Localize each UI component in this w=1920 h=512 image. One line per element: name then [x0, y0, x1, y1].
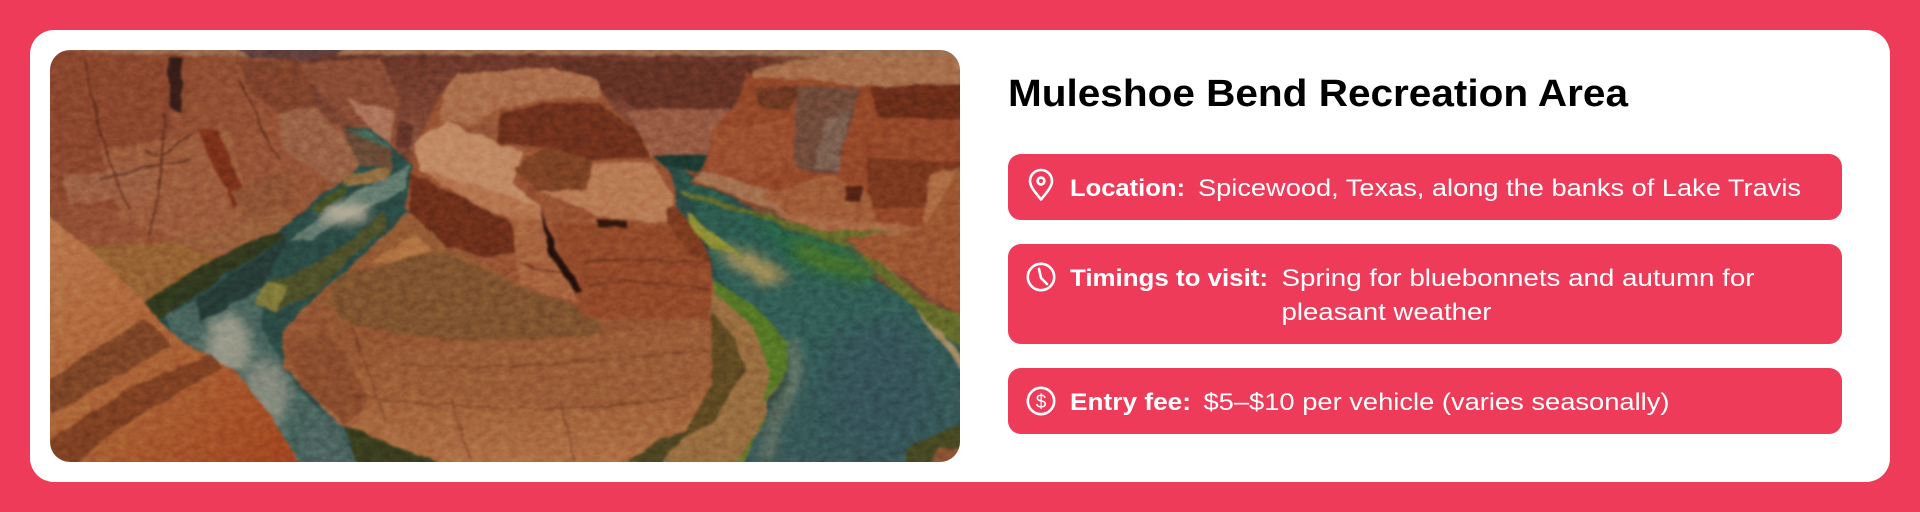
entry fee label: Entry fee:	[1070, 389, 1191, 416]
location label: Location:	[1070, 175, 1185, 202]
heading: Muleshoe Bend Recreation Area	[1008, 73, 1629, 115]
timings label: Timings to visit:	[1070, 265, 1268, 292]
entry fee value: $5–$10 per vehicle (varies seasonally)	[1204, 389, 1670, 416]
icon: dollar coin: $	[1036, 392, 1047, 413]
icon: clock	[1028, 264, 1054, 290]
info row: timings	[1008, 244, 1842, 344]
icon: dollar coin	[1028, 388, 1054, 414]
icon: map pin	[1030, 170, 1052, 200]
info row: entry fee	[1008, 368, 1842, 434]
photo: canyon river bend	[50, 50, 960, 462]
location value: Spicewood, Texas, along the banks of Lake Travis	[1198, 175, 1801, 202]
timings value	[1282, 265, 1755, 326]
timings value: pleasant weather	[1282, 299, 1492, 326]
info row: location	[1008, 154, 1842, 220]
timings value: Spring for bluebonnets and autumn for	[1282, 265, 1755, 292]
